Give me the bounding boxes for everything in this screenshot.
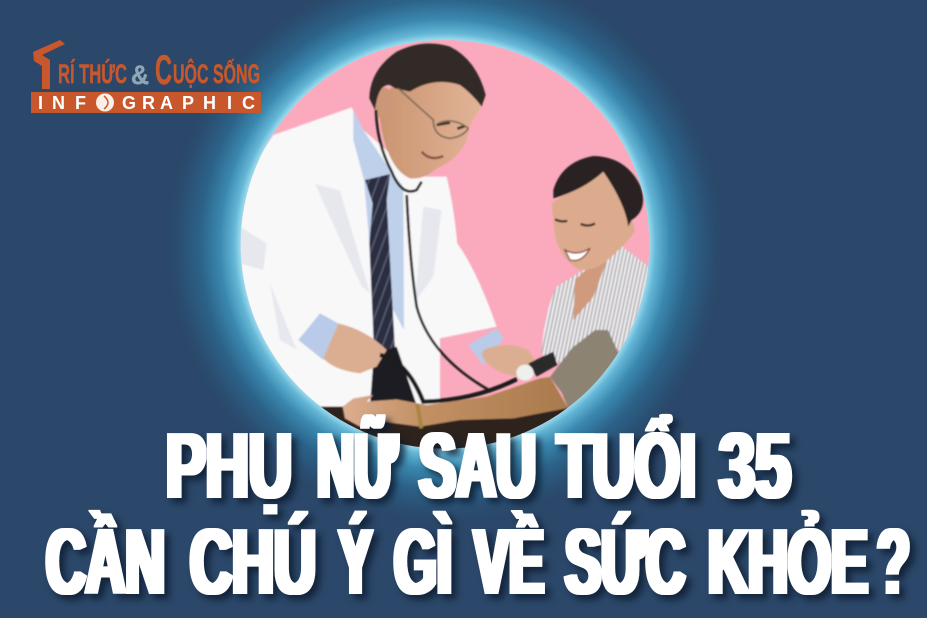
pressure gauge valve <box>528 352 557 377</box>
banner O icon <box>96 94 114 112</box>
doctor eyes <box>437 123 465 129</box>
circular glow <box>160 0 730 529</box>
doctor hair <box>369 43 486 110</box>
logo ampersand: & <box>131 60 149 90</box>
necktie <box>364 174 396 370</box>
title line 2: VỀ <box>474 510 544 614</box>
title line 2: SỨC <box>565 510 685 614</box>
doctor glasses <box>398 88 468 138</box>
title line 1: SAU <box>419 414 536 518</box>
blood pressure cuff <box>550 329 619 408</box>
table <box>320 407 587 463</box>
woman's hair <box>553 156 643 227</box>
woman's shirt <box>542 245 653 363</box>
title line 2: GÌ <box>394 510 452 614</box>
title line 2: CHÚ <box>190 510 316 614</box>
title line 1 <box>166 414 791 518</box>
title line 2 <box>46 510 910 614</box>
gauge bulb <box>516 365 534 381</box>
dark lower tie <box>370 347 417 405</box>
logo C initial: C <box>155 46 172 93</box>
shirt collar and front <box>353 110 404 330</box>
doctor neck and face <box>377 73 484 179</box>
doctor smile <box>422 152 443 158</box>
banner O icon swirl <box>104 96 108 109</box>
photo: doctor measuring a woman's blood pressure <box>240 40 650 448</box>
logo wordmark: RÍ THỨC <box>58 58 127 89</box>
doctor ear <box>374 86 389 118</box>
stethoscope tubes <box>376 110 517 391</box>
woman's smile <box>565 248 590 261</box>
woman's eyes <box>555 219 595 226</box>
pump tube <box>380 355 517 402</box>
bracelet <box>417 404 421 428</box>
title line 1: TUỔI <box>557 414 696 518</box>
title line 1: NỮ <box>317 414 397 518</box>
banner text: INF <box>38 93 86 113</box>
logo wordmark second part: UỘC SỐNG <box>173 57 260 89</box>
woman's face <box>552 167 635 270</box>
coat shading <box>240 184 442 350</box>
banner text remainder: GRAPHIC <box>122 93 255 113</box>
title line 2: Ý <box>339 510 372 614</box>
title <box>46 414 910 614</box>
doctor cuffs <box>298 313 503 365</box>
doctor hands <box>323 323 535 377</box>
doctor white coat <box>230 107 497 413</box>
woman's neck and chest <box>572 261 606 320</box>
title line 2: CẦN <box>46 510 165 614</box>
title line 1: PHỤ <box>166 414 292 518</box>
logo: Tri Thuc & Cuoc Song Infographic <box>31 40 261 113</box>
logo T mark <box>33 40 65 89</box>
title line 1: 35 <box>719 414 791 518</box>
woman's hand and forearm <box>343 377 568 427</box>
infographic banner <box>31 92 261 113</box>
